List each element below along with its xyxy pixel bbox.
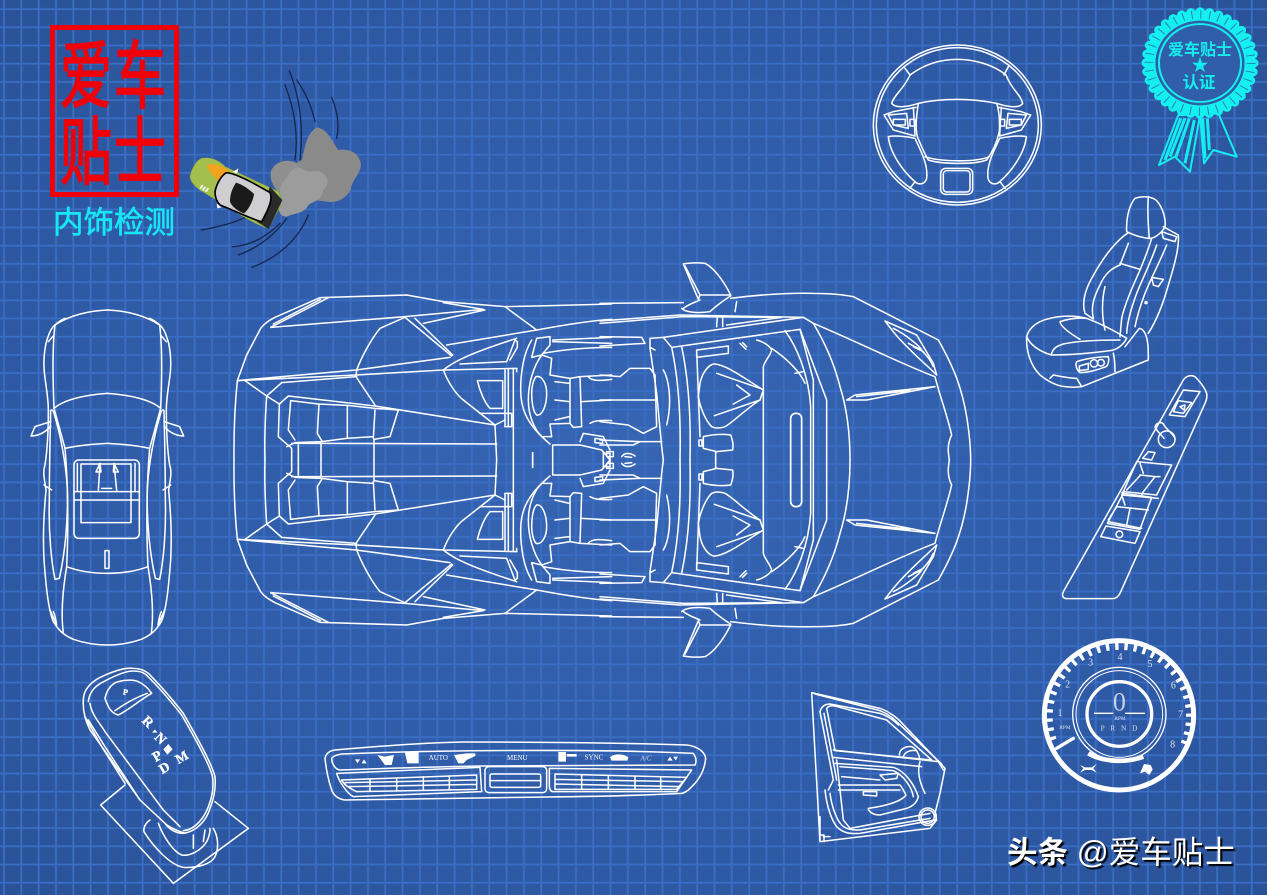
gauge numbers and readout: 7 bbox=[1178, 710, 1183, 721]
shifter legends: D bbox=[157, 760, 173, 778]
badge text: 爱车贴士 bbox=[1168, 40, 1232, 59]
gauge numbers and readout: RPM bbox=[1059, 725, 1071, 731]
shifter legends: P bbox=[150, 748, 165, 766]
shifter legends: P bbox=[122, 687, 129, 697]
gauge numbers and readout: 6 bbox=[1171, 681, 1176, 692]
gauge dial and scale bbox=[1044, 641, 1194, 790]
gauge numbers and readout: P R N D bbox=[1101, 724, 1139, 733]
climate panel labels: AUTO bbox=[429, 754, 448, 762]
gauge numbers and readout: 0 bbox=[1113, 688, 1126, 717]
watermark: 头条 @爱车贴士: 头条 @爱车贴士 bbox=[1007, 834, 1235, 870]
climate panel labels: A/C bbox=[640, 755, 652, 763]
heading: 内饰检测: 内饰检测 bbox=[53, 206, 175, 240]
climate panel icons bbox=[355, 752, 678, 765]
shifter legends bbox=[122, 687, 191, 778]
badge text: 认证 bbox=[1182, 73, 1216, 92]
gauge numbers and readout bbox=[1057, 652, 1183, 751]
shifter markers bbox=[152, 729, 173, 755]
door panel line drawing bbox=[812, 693, 945, 842]
small coupe left side bbox=[31, 310, 107, 645]
gauge numbers and readout: RPM bbox=[1114, 716, 1126, 722]
climate panel labels: SYNC bbox=[585, 753, 604, 761]
gauge numbers and readout: 8 bbox=[1170, 740, 1175, 751]
climate panel line drawing bbox=[325, 742, 706, 800]
instrument cluster gauge bbox=[1044, 641, 1194, 790]
logo stamp: 爱车贴士: 士 bbox=[114, 111, 166, 194]
window switch panel line drawing bbox=[1063, 376, 1207, 599]
shifter legends: M bbox=[173, 747, 191, 767]
badge text: ★ bbox=[1192, 56, 1208, 75]
climate panel labels: MENU bbox=[507, 754, 528, 762]
gauge numbers and readout: 5 bbox=[1147, 659, 1152, 670]
main car upper half, mirrored below bbox=[234, 263, 971, 507]
badge rosette ring bbox=[1146, 12, 1254, 114]
climate panel labels bbox=[429, 753, 652, 763]
gauge warning icons bbox=[1080, 764, 1153, 775]
gear shifter bbox=[83, 668, 248, 883]
drifting car illustration with smoke and skid marks bbox=[190, 71, 361, 267]
small coupe top view bbox=[31, 310, 184, 645]
shifter line drawing bbox=[83, 668, 248, 883]
badge ribbons bbox=[1159, 113, 1237, 172]
gauge numbers and readout: 3 bbox=[1088, 657, 1093, 668]
logo stamp: 爱车贴士: 贴 bbox=[60, 111, 112, 194]
badge text bbox=[1168, 40, 1232, 92]
gauge numbers and readout: 4 bbox=[1117, 652, 1122, 663]
gauge numbers and readout: 2 bbox=[1065, 680, 1070, 691]
logo stamp: 爱车贴士: 爱 bbox=[60, 35, 112, 118]
main sports car top view line drawing bbox=[234, 263, 971, 657]
gauge numbers and readout: 1 bbox=[1057, 708, 1062, 719]
certification rosette badge bbox=[1146, 12, 1254, 172]
shifter legends: R bbox=[138, 714, 157, 732]
shifter legends: N bbox=[151, 730, 169, 748]
seat line drawing bbox=[1027, 197, 1178, 387]
logo stamp: 爱车贴士: 车 bbox=[114, 35, 166, 118]
steering wheel bbox=[873, 45, 1041, 205]
climate control panel bbox=[325, 742, 706, 800]
logo stamp: 爱车贴士 bbox=[52, 28, 176, 194]
